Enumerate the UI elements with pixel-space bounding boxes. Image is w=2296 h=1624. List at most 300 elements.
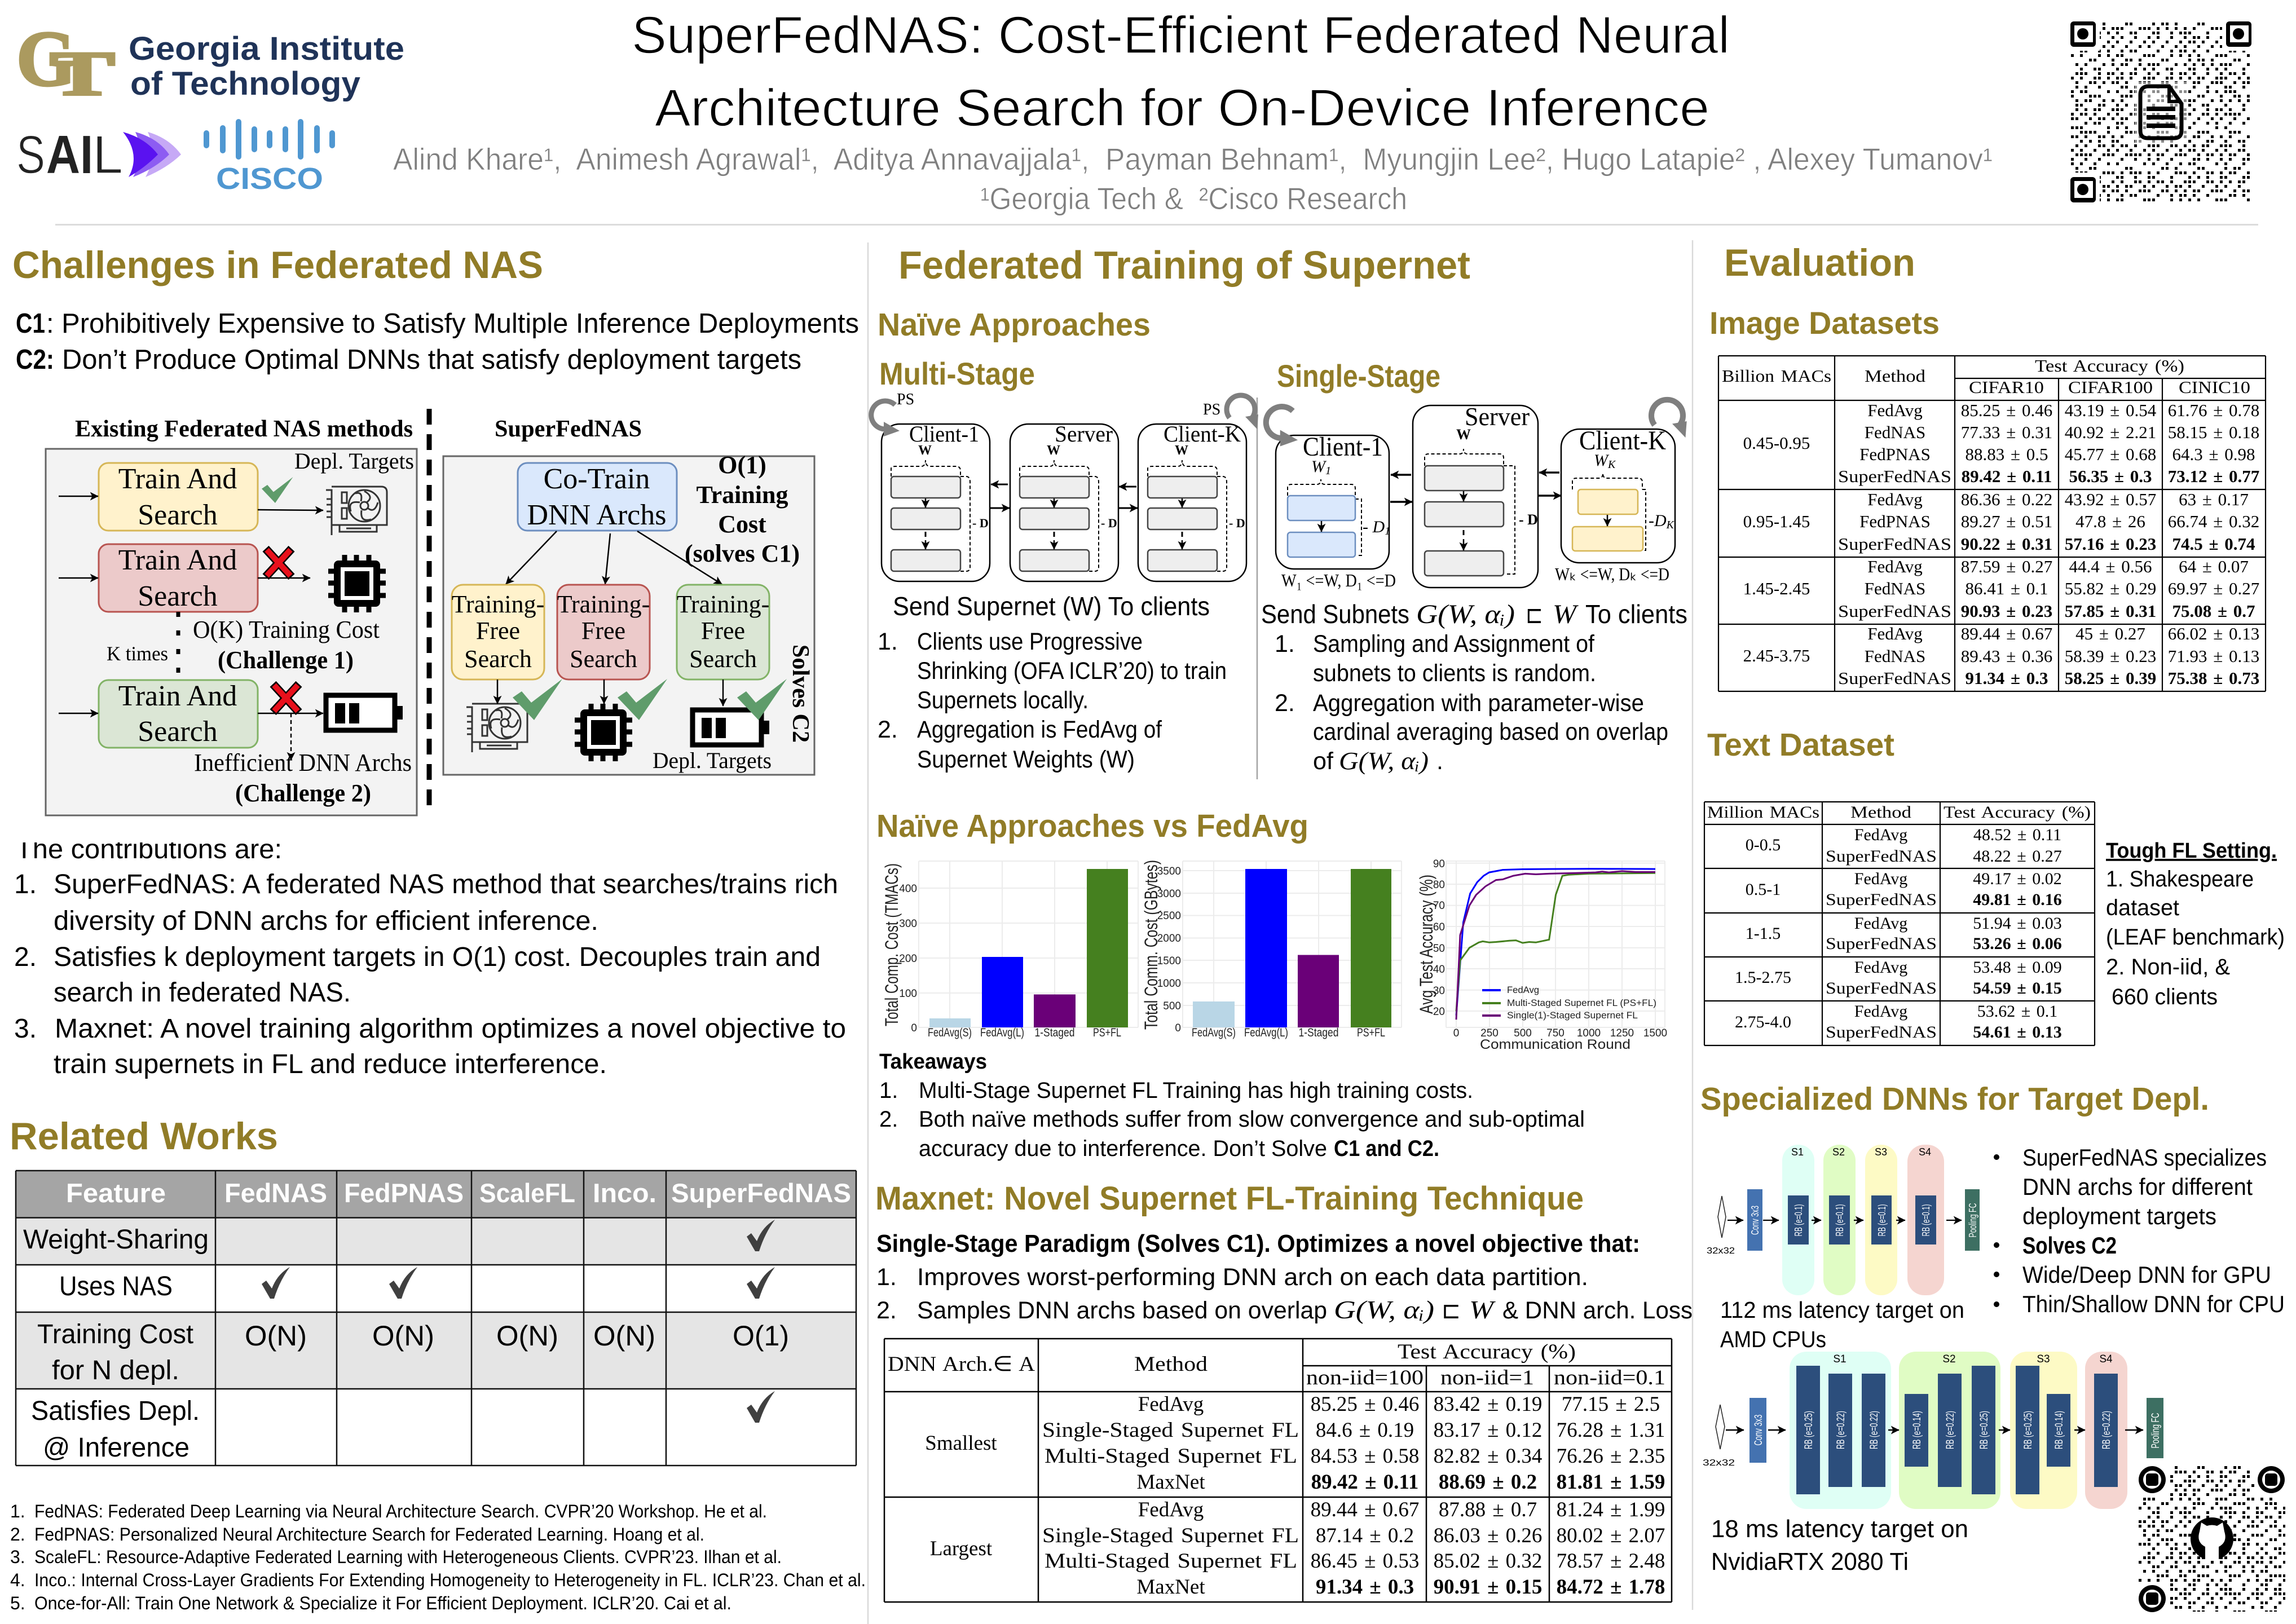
label: O(1) training cost: O(1): [718, 451, 766, 479]
text: specialization bullets: Solves C2: [2022, 1232, 2117, 1259]
box: training-free search green: Search: [689, 645, 757, 673]
icon: CPU: [328, 555, 386, 612]
diagram: large architecture for GPU: RB (e=0.25): [1803, 1411, 1815, 1449]
table: text dataset results: SuperFedNAS: [1826, 979, 1937, 998]
table: image dataset results: 90.93 ± 0.23: [1961, 601, 2052, 621]
client 1: 1: [1385, 525, 1390, 537]
table: Maxnet results: Largest: [930, 1537, 993, 1560]
server: [1413, 402, 1538, 588]
box: training-free search green: Free: [701, 617, 745, 645]
text: multi-stage description: Supernet Weights (W): [917, 746, 1135, 773]
table: Maxnet results: 91.34 ± 0.3: [1316, 1576, 1414, 1599]
table: Maxnet results: DNN Arch.∈ A: [888, 1353, 1035, 1376]
box: training-free search green: Training-: [677, 590, 769, 618]
chart: accuracy vs communication round: 1500: [1643, 1027, 1667, 1039]
table: text dataset results: FedAvg: [1854, 914, 1907, 933]
table: related works: Weight-Sharing: [23, 1225, 209, 1255]
table: text dataset results: 48.22 ± 0.27: [1973, 847, 2062, 866]
diagram: small architecture for CPU: RB (e=0.1): [1793, 1204, 1804, 1236]
table: image dataset results: SuperFedNAS: [1838, 534, 1951, 554]
table: Maxnet results: 84.53 ± 0.58: [1311, 1445, 1419, 1468]
text: single-stage description: [1261, 599, 1687, 775]
table: image dataset results: FedAvg: [1867, 489, 1923, 509]
diagram: large architecture for GPU: RB (e=0.22): [1945, 1411, 1956, 1449]
chart: accuracy vs communication round: 60: [1433, 921, 1445, 933]
icon: red cross 2: [273, 684, 299, 712]
text: challenges C1 and C2: C2:: [16, 345, 54, 375]
table: related works: FedNAS: [224, 1178, 327, 1208]
label: 18 ms target: 18 ms latency target on: [1711, 1515, 1968, 1543]
text: single-stage description: of: [1313, 748, 1334, 775]
diagram: multi-stage supernet: - D: [1229, 516, 1245, 530]
arrows: search to targets: [497, 679, 723, 706]
icon: CPU target: [575, 704, 632, 761]
heading: Text Dataset: Text Dataset: [1707, 727, 1894, 763]
table: Maxnet results: Single-Staged Supernet FL: [1042, 1419, 1299, 1442]
text: takeaways: 2.: [879, 1107, 898, 1132]
table: image dataset results: FedPNAS: [1859, 511, 1931, 531]
table: image dataset results: 61.76 ± 0.78: [2168, 400, 2259, 420]
table: Maxnet results: Multi-Staged Supernet FL: [1045, 1445, 1297, 1468]
chart: accuracy vs communication round: 40: [1433, 964, 1445, 976]
table: Maxnet results: MaxNet: [1136, 1576, 1205, 1599]
table: Maxnet results: Smallest: [925, 1432, 997, 1455]
client K: -D: [1649, 511, 1667, 530]
table: Maxnet results: non-iid=100: [1306, 1366, 1424, 1389]
chart: accuracy vs communication round: 500: [1514, 1027, 1532, 1039]
diagram: small architecture for CPU: Conv 3x3: [1749, 1206, 1761, 1235]
chart: total computation cost: FedAvg(L): [980, 1026, 1024, 1039]
table: Maxnet results: [884, 1339, 1672, 1602]
box: training-free search yellow: [452, 585, 544, 679]
table: image dataset results: 58.25 ± 0.39: [2065, 668, 2156, 688]
table: image dataset results: 56.35 ± 0.3: [2069, 466, 2152, 486]
heading: Multi-Stage: Multi-Stage: [879, 356, 1035, 391]
server: W: [1456, 426, 1471, 443]
text: Maxnet description: Improves worst-performing DNN arch on each data partition.: [917, 1264, 1588, 1291]
table: Maxnet results: Single-Staged Supernet FL: [1042, 1524, 1299, 1547]
chart: total communication cost: 500: [1163, 1000, 1181, 1012]
text: challenges C1 and C2: C1: [16, 308, 45, 339]
chart: total communication cost: FedAvg(L): [1244, 1026, 1288, 1039]
diagram: small architecture for CPU: S1: [1791, 1146, 1804, 1158]
table: image dataset results: 43.19 ± 0.54: [2065, 400, 2157, 420]
client 1: 1: [1325, 465, 1331, 477]
chart: accuracy vs communication round: 1250: [1610, 1027, 1634, 1039]
table: image dataset results: 86.36 ± 0.22: [1961, 489, 2052, 509]
text: single-stage description: Aggregation with parameter-wise: [1313, 690, 1644, 717]
text: tough FL setting: 660 clients: [2112, 985, 2218, 1009]
table: image dataset results: FedNAS: [1865, 579, 1925, 598]
box: train and search red: Search: [138, 580, 218, 612]
legend: [1482, 985, 1656, 1021]
text: single-stage description: subnets to clients is random.: [1313, 660, 1596, 687]
label: O(K) training cost: [193, 616, 380, 674]
table: text dataset results: 53.26 ± 0.06: [1973, 934, 2062, 953]
table: related works: ScaleFL: [479, 1178, 575, 1208]
text: multi-stage description: 2.: [878, 716, 898, 743]
table: image dataset results: 74.5 ± 0.74: [2172, 534, 2255, 554]
chart: accuracy vs communication round: [1416, 858, 1667, 1052]
label: client 1 constraint: W₁ <=W, D₁ <=D: [1281, 570, 1396, 590]
table: text dataset results: 51.94 ± 0.03: [1973, 914, 2062, 933]
box: training-free search red: Free: [581, 617, 625, 645]
chart: total communication cost: Total Comm. Cost (GBytes): [1141, 860, 1161, 1030]
table: image dataset results: 63 ± 0.17: [2179, 489, 2249, 509]
text: single-stage description: .: [1436, 748, 1443, 775]
chart: accuracy vs communication round: 90: [1433, 858, 1445, 870]
diagram: large architecture for GPU: RB (e=0.22): [1868, 1411, 1880, 1449]
table: image dataset results: 89.44 ± 0.67: [1961, 624, 2052, 643]
text: single-stage description: Sampling and Assignment of: [1313, 630, 1595, 657]
chart: total computation cost: 300: [899, 918, 917, 930]
label: 18 ms target: [1711, 1515, 1968, 1576]
table: image dataset results: 89.27 ± 0.51: [1961, 511, 2052, 531]
text: references: [10, 1501, 866, 1613]
table: Maxnet results: 85.25 ± 0.46: [1311, 1393, 1419, 1416]
chart: total communication cost: 3000: [1157, 888, 1181, 900]
diagram: small architecture for CPU: S2: [1832, 1146, 1845, 1158]
panel: SuperFedNAS: SuperFedNAS: [495, 416, 642, 442]
table: Maxnet results: 87.88 ± 0.7: [1439, 1498, 1537, 1521]
label: K times: K times: [107, 642, 168, 665]
table: Maxnet results: Multi-Staged Supernet FL: [1045, 1550, 1297, 1573]
text: single-stage description: 1.: [1275, 630, 1295, 657]
diagram: single-stage supernet: [1266, 400, 1687, 590]
text: Maxnet description: [876, 1230, 1693, 1324]
icon: GPU: [326, 487, 387, 535]
chart: accuracy vs communication round: 30: [1433, 985, 1445, 997]
table: related works: SuperFedNAS: [671, 1178, 851, 1208]
text: challenges C1 and C2: : Prohibitively Expensive to Satisfy Multiple Inference Deployments: [46, 308, 859, 339]
text: multi-stage description: Clients use Progressive: [917, 628, 1143, 655]
table: Maxnet results: 78.57 ± 2.48: [1557, 1550, 1665, 1573]
chart: accuracy vs communication round: 70: [1433, 900, 1445, 912]
table: image dataset results: 45 ± 0.27: [2075, 624, 2145, 643]
diagram: multi-stage supernet: PS: [1203, 401, 1220, 418]
box: training-free search green: [677, 585, 769, 679]
logo: Georgia Tech: Georgia Institute: [129, 30, 404, 67]
diagram: large architecture for GPU: S4: [2099, 1353, 2113, 1365]
table: text dataset results: 2.75-4.0: [1735, 1013, 1791, 1031]
diagram: large architecture for GPU: S3: [2037, 1353, 2050, 1365]
text: takeaways: Multi-Stage Supernet FL Training has high training costs.: [919, 1078, 1473, 1103]
logo: Georgia Tech: T: [50, 39, 115, 109]
authors: [393, 142, 1993, 216]
table: related works: O(N): [496, 1320, 558, 1352]
box: train and search green: Search: [138, 716, 218, 748]
diagram: small architecture for CPU: Pooling FC: [1967, 1203, 1978, 1238]
label: O(1) training cost: Training: [696, 481, 788, 509]
text: references: FedNAS: Federated Deep Learning via Neural Architecture Search. CVPR’20 Workshop. He et al.: [34, 1501, 767, 1521]
title: [632, 6, 1730, 137]
logo: SAIL: L: [92, 125, 123, 185]
diagram: multi-stage supernet: W: [1175, 443, 1188, 458]
table: image dataset results: Method: [1865, 366, 1926, 386]
icon: cycle right: [1651, 400, 1687, 438]
text: takeaways: Takeaways: [879, 1050, 987, 1074]
QR code: GitHub: [2135, 1463, 2289, 1616]
chart: total communication cost: 3500: [1157, 866, 1181, 877]
diagram: large architecture for GPU: [1703, 1352, 2163, 1509]
icon: cycle left: [1266, 407, 1298, 447]
table: image dataset results: 69.97 ± 0.27: [2168, 579, 2259, 598]
chart: total communication cost: FedAvg(S): [1192, 1026, 1236, 1039]
table: Maxnet results: 88.69 ± 0.2: [1439, 1471, 1537, 1494]
table: image dataset results: 86.41 ± 0.1: [1965, 579, 2048, 598]
table: image dataset results: 66.02 ± 0.13: [2168, 624, 2259, 643]
table: image dataset results: SuperFedNAS: [1838, 668, 1951, 688]
table: text dataset results: SuperFedNAS: [1826, 847, 1937, 866]
client K: K: [1666, 519, 1675, 531]
table: text dataset results: SuperFedNAS: [1826, 1023, 1937, 1042]
title: Architecture Search for On-Device Inference: [655, 78, 1709, 137]
table: Maxnet results: non-iid=0.1: [1554, 1366, 1665, 1389]
chart: total communication cost: [1141, 860, 1402, 1039]
diagram: multi-stage supernet: Client-K: [1164, 421, 1241, 447]
icon: GPU target: [466, 704, 527, 752]
box: training-free search yellow: Search: [464, 645, 532, 673]
text: contributions: 2.: [14, 942, 37, 972]
text: contributions: 3.: [14, 1014, 37, 1044]
text: single-stage description: Send Subnets: [1261, 599, 1409, 629]
table: image dataset results: 58.39 ± 0.23: [2065, 646, 2156, 666]
text: Maxnet description: W: [1469, 1295, 1496, 1324]
table: image dataset results: 71.93 ± 0.13: [2168, 646, 2259, 666]
diagram: multi-stage supernet: - D: [972, 516, 989, 530]
text: Maxnet description: ⊏: [1442, 1296, 1461, 1324]
icon: battery: [326, 695, 403, 730]
table: Maxnet results: 83.17 ± 0.12: [1434, 1419, 1542, 1442]
text: references: Inco.: Internal Cross-Layer Gradients For Extending Homogeneity to Heterogeneity in FL. ICLR’23. Chan et al.: [34, 1570, 866, 1590]
table: text dataset results: FedAvg: [1854, 826, 1907, 844]
text: tough FL setting: [2106, 839, 2285, 1009]
text: contributions: Maxnet: A novel training algorithm optimizes a novel objective to: [55, 1014, 846, 1044]
text: challenges C1 and C2: [16, 308, 859, 375]
table: image dataset results: 0.95-1.45: [1743, 511, 1810, 531]
arrow: dashed down: [290, 713, 292, 760]
box: train and search yellow: Search: [138, 499, 218, 531]
table: Maxnet results: 89.44 ± 0.67: [1311, 1498, 1419, 1521]
text: single-stage description: G(W, αᵢ): [1339, 747, 1429, 775]
box: training-free search yellow: Free: [476, 617, 520, 645]
table: Maxnet results: MaxNet: [1136, 1471, 1205, 1494]
logo: Cisco: CISCO: [216, 162, 323, 196]
text: multi-stage description: Aggregation is FedAvg of: [917, 716, 1162, 743]
table: image dataset results: [1718, 356, 2266, 691]
server: Server: [1465, 402, 1530, 431]
table: related works: Feature: [66, 1178, 166, 1208]
chart: accuracy vs communication round: 250: [1480, 1027, 1499, 1039]
table: Maxnet results: 86.03 ± 0.26: [1434, 1524, 1542, 1547]
text: contributions: diversity of DNN archs for efficient inference.: [54, 906, 598, 936]
table: Maxnet results: 85.02 ± 0.32: [1434, 1550, 1542, 1573]
text: references: 1.: [10, 1501, 25, 1521]
table: Maxnet results: 89.42 ± 0.11: [1311, 1471, 1418, 1494]
table: text dataset results: [1704, 802, 2095, 1045]
diagram: small architecture for CPU: RB (e=0.1): [1920, 1204, 1932, 1236]
client 1: W: [1311, 457, 1325, 476]
label: inefficient DNN archs: (Challenge 2): [235, 779, 371, 807]
table: related works: O(N): [593, 1320, 655, 1352]
panel: existing federated NAS methods: Existing Federated NAS methods: [75, 416, 413, 442]
table: image dataset results: 57.16 ± 0.23: [2065, 534, 2156, 554]
chart: total communication cost: 1000: [1157, 978, 1181, 990]
table: text dataset results: FedAvg: [1854, 1002, 1907, 1021]
diagram: multi-stage supernet: W: [918, 443, 932, 458]
table: Maxnet results: Test Accuracy (%): [1398, 1340, 1576, 1363]
client K: K: [1607, 458, 1616, 471]
box: training-free search red: Search: [570, 645, 637, 673]
logo: SAIL: S: [16, 125, 45, 185]
table: text dataset results: 0.5-1: [1746, 880, 1781, 899]
label: O(K) training cost: O(K) Training Cost: [193, 616, 380, 643]
legend: FedAvg: [1507, 985, 1539, 995]
text: references: FedPNAS: Personalized Neural Architecture Search for Federated Learning. Hoang et al.: [34, 1524, 704, 1544]
box: training-free search red: Training-: [557, 590, 650, 618]
table: Maxnet results: Method: [1134, 1353, 1208, 1376]
heading: Naive Approaches: Naïve Approaches: [878, 307, 1151, 343]
table: text dataset results: 54.59 ± 0.15: [1973, 979, 2062, 998]
text: single-stage description: cardinal averaging based on overlap: [1313, 718, 1668, 745]
text: contributions: [0, 818, 846, 1079]
table: image dataset results: FedAvg: [1867, 624, 1923, 643]
table: Maxnet results: 76.28 ± 1.31: [1557, 1419, 1665, 1442]
table: image dataset results: 73.12 ± 0.77: [2168, 466, 2259, 486]
table: related works: for N depl.: [52, 1356, 179, 1385]
text: single-stage description: To clients: [1585, 599, 1687, 629]
table: text dataset results: 53.48 ± 0.09: [1973, 958, 2062, 977]
authors: ¹Georgia Tech & ²Cisco Research: [980, 181, 1407, 216]
table: image dataset results: FedPNAS: [1859, 444, 1931, 464]
text: Maxnet description: G(W, αᵢ): [1334, 1295, 1434, 1324]
chart: total communication cost: 1-Staged: [1298, 1026, 1339, 1039]
label: O(K) training cost: (Challenge 1): [218, 646, 354, 674]
text: takeaways: 1.: [879, 1078, 898, 1103]
text: specialization bullets: [1994, 1144, 2285, 1317]
text: Maxnet description: 1.: [876, 1264, 897, 1291]
table: image dataset results: SuperFedNAS: [1838, 466, 1951, 486]
diagram: large architecture for GPU: RB (e=0.22): [1835, 1411, 1847, 1449]
heading: Specialized DNNs: Specialized DNNs for Target Depl.: [1700, 1081, 2209, 1117]
icon: check: [262, 477, 293, 503]
chart: total communication cost: 0: [1175, 1022, 1181, 1034]
table: text dataset results: Million MACs: [1707, 803, 1819, 822]
box: train and search yellow: [99, 463, 258, 531]
text: contributions: Satisfies k deployment targets in O(1) cost. Decouples train and: [54, 942, 821, 972]
table: image dataset results: FedAvg: [1867, 557, 1923, 576]
text: multi-stage description: Send Supernet (W) To clients: [893, 592, 1210, 621]
panel: existing federated NAS methods: [46, 416, 417, 815]
chart: accuracy vs communication round: 0: [1453, 1027, 1459, 1039]
chart: total computation cost: [882, 861, 1138, 1039]
chart: total computation cost: PS+FL: [1093, 1026, 1121, 1039]
table: image dataset results: CIFAR100: [2068, 377, 2153, 397]
table: text dataset results: 49.81 ± 0.16: [1973, 890, 2062, 909]
diagram: small architecture for CPU: 32x32: [1707, 1246, 1735, 1256]
table: image dataset results: 90.22 ± 0.31: [1961, 534, 2052, 554]
box: train and search green: Train And: [118, 680, 237, 712]
table: image dataset results: 77.33 ± 0.31: [1961, 422, 2052, 442]
label: O(1) training cost: (solves C1): [685, 540, 800, 567]
diagram: large architecture for GPU: S1: [1833, 1353, 1847, 1365]
table: Maxnet results: non-iid=1: [1440, 1366, 1534, 1389]
table: image dataset results: SuperFedNAS: [1838, 601, 1951, 621]
table: text dataset results: Test Accuracy (%): [1944, 803, 2091, 822]
label: 112 ms target: AMD CPUs: [1720, 1326, 1826, 1352]
table: text dataset results: SuperFedNAS: [1826, 890, 1937, 909]
table: image dataset results: 64.3 ± 0.98: [2172, 444, 2255, 464]
table: Maxnet results: FedAvg: [1138, 1393, 1204, 1416]
authors: Alind Khare¹, Animesh Agrawal¹, Aditya Annavajjala¹, Payman Behnam¹, Myungjin Lee², Hugo Latapie² , Alexey Tumanov¹: [393, 142, 1993, 176]
diagram: multi-stage supernet: Client-1: [909, 421, 979, 447]
table: image dataset results: CINIC10: [2179, 377, 2250, 397]
diagram: large architecture for GPU: Conv 3x3: [1753, 1414, 1765, 1446]
heading: Naive Approaches vs FedAvg: Naïve Approaches vs FedAvg: [876, 808, 1308, 844]
text: tough FL setting: 1. Shakespeare: [2106, 867, 2254, 892]
table: image dataset results: 43.92 ± 0.57: [2065, 489, 2156, 509]
text: specialization bullets: SuperFedNAS specializes: [2022, 1144, 2267, 1171]
chart: total communication cost: 2000: [1157, 933, 1181, 945]
chart: total computation cost: 0: [911, 1022, 917, 1034]
client K: W: [1594, 451, 1608, 470]
table: Maxnet results: 90.91 ± 0.15: [1434, 1576, 1542, 1599]
heading: Single-Stage: Single-Stage: [1277, 358, 1440, 394]
table: related works: O(N): [372, 1320, 434, 1352]
heading: Maxnet: Maxnet: Novel Supernet FL-Training Technique: [875, 1180, 1584, 1217]
chart: accuracy vs communication round: 80: [1433, 879, 1445, 891]
diagram: small architecture for CPU: [1707, 1145, 1980, 1295]
table: image dataset results: FedAvg: [1867, 400, 1923, 420]
icon: checks: [513, 679, 787, 720]
icon: red cross 1: [266, 549, 292, 577]
label: 112 ms target: 112 ms latency target on: [1720, 1297, 1964, 1323]
diagram: large architecture for GPU: RB (e=0.22): [2101, 1411, 2113, 1449]
table: Maxnet results: 83.42 ± 0.19: [1434, 1393, 1542, 1416]
diagram: large architecture for GPU: RB (e=0.14): [2053, 1411, 2065, 1449]
table: image dataset results: Billion MACs: [1722, 366, 1831, 386]
diagram: multi-stage supernet: Server: [1055, 421, 1113, 447]
table: image dataset results: FedNAS: [1865, 646, 1925, 666]
text: Maxnet description: 2.: [876, 1297, 897, 1324]
table: Maxnet results: 81.81 ± 1.59: [1557, 1471, 1665, 1494]
text: challenges C1 and C2: Don’t Produce Optimal DNNs that satisfy deployment targets: [62, 345, 801, 375]
text: single-stage description: 2.: [1275, 690, 1295, 717]
table: image dataset results: Test Accuracy (%): [2035, 356, 2184, 376]
client K: [1561, 426, 1675, 563]
chart: total communication cost: PS+FL: [1357, 1026, 1385, 1039]
table: image dataset results: CIFAR10: [1969, 377, 2044, 397]
arrows: server and clients: [1390, 473, 1561, 502]
chart: total computation cost: Total Comp. Cost (TMACs): [882, 863, 902, 1026]
chart: total computation cost: 1-Staged: [1034, 1026, 1075, 1039]
table: related works: Inco.: [593, 1178, 656, 1208]
heading: Evaluation: Evaluation: [1724, 241, 1915, 284]
table: text dataset results: 0-0.5: [1746, 836, 1781, 854]
table: text dataset results: Method: [1850, 803, 1911, 822]
table: text dataset results: 49.17 ± 0.02: [1973, 870, 2062, 888]
table: Maxnet results: 80.02 ± 2.07: [1557, 1524, 1665, 1547]
title: SuperFedNAS: Cost-Efficient Federated Neural: [632, 6, 1730, 64]
table: image dataset results: 45.77 ± 0.68: [2065, 444, 2156, 464]
text: Maxnet description: Single-Stage Paradigm (Solves C1). Optimizes a novel objective that:: [876, 1230, 1640, 1257]
chart: accuracy vs communication round: 50: [1433, 943, 1445, 955]
text: single-stage description: W: [1553, 599, 1579, 629]
icon: battery target: [693, 710, 769, 745]
diagram: large architecture for GPU: RB (e=0.25): [1978, 1411, 1990, 1449]
table: Maxnet results: 82.82 ± 0.34: [1434, 1445, 1542, 1468]
text: references: 5.: [10, 1593, 25, 1613]
